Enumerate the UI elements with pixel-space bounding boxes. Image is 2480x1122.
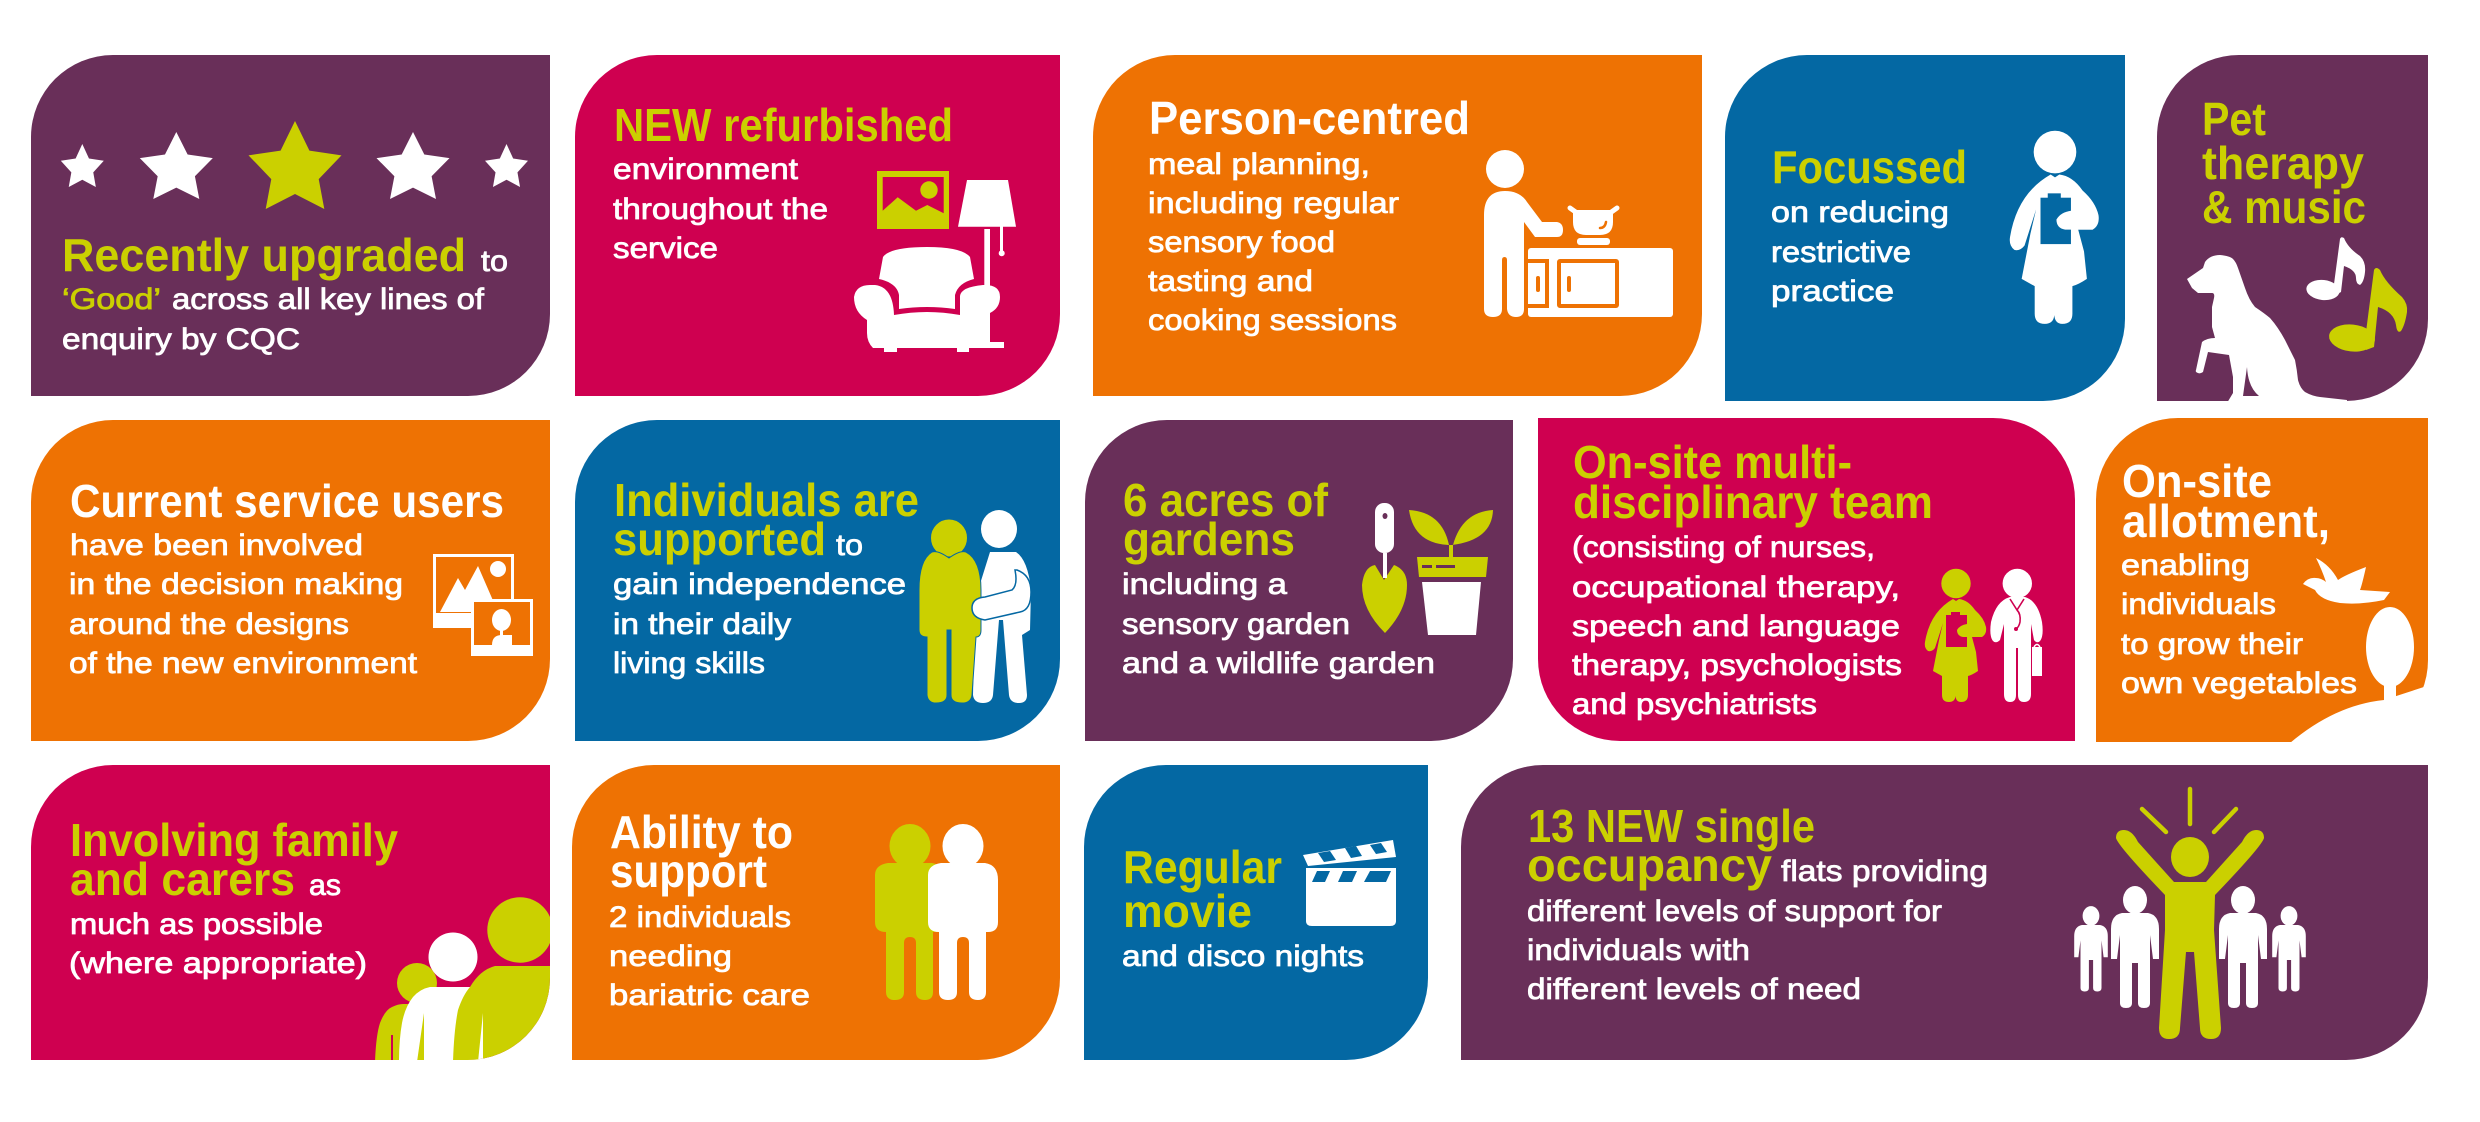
- body text: ‘Good’: [62, 283, 161, 316]
- icon: nurse with clipboard: [2010, 131, 2099, 324]
- body text: as: [309, 869, 341, 902]
- icon: lime person: [875, 824, 945, 1000]
- panel: person-centred: [1093, 55, 1702, 396]
- body text: [613, 153, 828, 265]
- heading: [2122, 455, 2330, 547]
- body text: to: [481, 245, 508, 278]
- body text: sensory garden: [1122, 608, 1350, 641]
- panel background: [2157, 55, 2428, 401]
- body text: individuals with: [1527, 934, 1750, 967]
- body text: including regular: [1148, 187, 1399, 220]
- panel background: [575, 420, 1060, 741]
- body text: and disco nights: [1122, 940, 1364, 973]
- icon: five stars: [61, 121, 528, 209]
- body text: individuals: [2121, 588, 2276, 621]
- heading: and carers: [70, 853, 295, 905]
- body text: enquiry by CQC: [62, 323, 300, 356]
- body text: to: [836, 529, 863, 562]
- icon: person cooking: [1484, 150, 1673, 317]
- icon: raised arms person with rays: [2116, 789, 2264, 1039]
- body text: speech and language: [1572, 610, 1900, 643]
- body text: on reducing: [1771, 196, 1949, 229]
- body text: own vegetables: [2121, 667, 2357, 700]
- heading: Pet: [2202, 93, 2266, 145]
- heading: supported: [613, 513, 826, 565]
- body text: have been involved: [70, 529, 363, 562]
- heading: allotment,: [2122, 495, 2330, 547]
- heading: [613, 474, 919, 565]
- icon: white music note: [2305, 237, 2365, 302]
- body text: of the new environment: [69, 647, 418, 680]
- body text: bariatric care: [609, 979, 810, 1012]
- panel: pet therapy and music: [2157, 55, 2428, 403]
- panel: on-site allotment: [2096, 418, 2430, 743]
- icon: bird: [2303, 558, 2390, 604]
- heading: [2202, 93, 2366, 233]
- body text: cooking sessions: [1148, 304, 1397, 337]
- heading: 13 NEW single: [1528, 800, 1815, 852]
- heading: Individuals are: [614, 474, 919, 526]
- heading: Focussed: [1772, 141, 1967, 193]
- body text: tasting and: [1148, 265, 1313, 298]
- panel background: [572, 765, 1060, 1060]
- body text: sensory food: [1148, 226, 1335, 259]
- heading: NEW refurbished: [614, 99, 953, 151]
- heading: & music: [2202, 181, 2366, 233]
- icon: group of four white people: [2074, 886, 2306, 1008]
- panel: regular movie: [1084, 765, 1428, 1060]
- body text: [2121, 549, 2357, 700]
- heading: Regular: [1123, 841, 1282, 893]
- panel: recently upgraded: [31, 55, 550, 396]
- heading: [610, 806, 793, 897]
- panel: on-site multi-disciplinary team: [1538, 418, 2075, 741]
- body text: in the decision making: [69, 568, 403, 601]
- heading: Recently upgraded: [62, 229, 466, 281]
- icon: nurse: [1925, 569, 1986, 702]
- body text: [1771, 196, 1949, 308]
- heading: [70, 814, 398, 905]
- body text: needing: [609, 940, 732, 973]
- heading: [1527, 800, 1815, 891]
- body text: [1148, 148, 1399, 337]
- body text: in their daily: [613, 608, 791, 641]
- heading: Current service users: [70, 475, 504, 527]
- icon: picture frame: [877, 171, 949, 229]
- body text: [609, 901, 810, 1012]
- icon: clapperboard: [1303, 840, 1396, 926]
- body text: occupational therapy,: [1572, 571, 1900, 604]
- body text: meal planning,: [1148, 148, 1370, 181]
- panel: six acres of gardens: [1085, 420, 1513, 741]
- panel: individuals are supported: [575, 420, 1060, 741]
- body text: environment: [613, 153, 799, 186]
- body text: around the designs: [69, 608, 349, 641]
- body text: [1527, 855, 1988, 1006]
- heading: 6 acres of: [1123, 474, 1329, 526]
- panel: current service users: [31, 420, 550, 741]
- icon: family group: [375, 897, 553, 1062]
- panel: new refurbished: [575, 55, 1060, 396]
- panel background: [1538, 418, 2075, 741]
- body text: different levels of need: [1527, 973, 1861, 1006]
- body text: [69, 529, 418, 680]
- panel: ability to support: [572, 765, 1060, 1060]
- heading: Involving family: [70, 814, 398, 866]
- heading: [1573, 436, 1933, 528]
- panel background: [31, 420, 550, 741]
- body text: flats providing: [1781, 855, 1988, 888]
- body text: different levels of support for: [1527, 895, 1942, 928]
- heading: gardens: [1123, 513, 1295, 565]
- panel: focussed: [1725, 55, 2125, 401]
- body text: service: [613, 232, 718, 265]
- body text: and psychiatrists: [1572, 688, 1817, 721]
- body text: to grow their: [2121, 628, 2303, 661]
- icon: two people supporting: [919, 510, 1031, 703]
- body text: and a wildlife garden: [1122, 647, 1435, 680]
- body text: [1122, 568, 1435, 680]
- body text: 2 individuals: [609, 901, 791, 934]
- body text: including a: [1122, 568, 1287, 601]
- panel background: [1725, 55, 2125, 401]
- icon: tree on a hill: [2290, 607, 2430, 743]
- icon: pictures: [433, 554, 533, 656]
- heading: On-site multi-: [1573, 436, 1852, 488]
- icon: doctor: [1990, 569, 2043, 702]
- body text: (consisting of nurses,: [1572, 531, 1875, 564]
- body text: living skills: [613, 647, 765, 680]
- icon: dog: [2187, 255, 2347, 403]
- body text: much as possible: [70, 908, 323, 941]
- heading: [1123, 841, 1282, 937]
- panel background: [31, 55, 550, 396]
- icon: white person: [928, 824, 998, 1000]
- body text: across all key lines of: [172, 283, 485, 316]
- panel background: [1084, 765, 1428, 1060]
- body text: [613, 529, 906, 680]
- icon: potted plant: [1409, 510, 1493, 635]
- panel background: [1085, 420, 1513, 741]
- heading: [1123, 474, 1329, 565]
- panel: thirteen new flats: [1461, 765, 2428, 1060]
- icon: trowel: [1362, 503, 1407, 633]
- body text: [62, 245, 508, 356]
- heading: Ability to: [610, 806, 793, 858]
- heading: disciplinary team: [1573, 476, 1933, 528]
- body text: throughout the: [613, 193, 828, 226]
- panel background: [575, 55, 1060, 396]
- body text: gain independence: [613, 568, 906, 601]
- heading: movie: [1123, 885, 1252, 937]
- panel background: [1093, 55, 1702, 396]
- body text: enabling: [2121, 549, 2250, 582]
- icon: lamp and armchair: [854, 180, 1016, 352]
- heading: support: [610, 845, 767, 897]
- body text: restrictive: [1771, 236, 1911, 269]
- icon: lime music note: [2328, 268, 2407, 354]
- panel background: [31, 765, 550, 1060]
- heading: On-site: [2122, 455, 2272, 507]
- body text: (where appropriate): [69, 947, 367, 980]
- panel: involving family and carers: [31, 765, 553, 1062]
- body text: [69, 869, 367, 980]
- heading: Person-centred: [1149, 92, 1470, 144]
- panel background: [2096, 418, 2428, 742]
- body text: therapy, psychologists: [1572, 649, 1902, 682]
- panel background: [1461, 765, 2428, 1060]
- heading: occupancy: [1527, 839, 1772, 891]
- heading: therapy: [2202, 137, 2364, 189]
- body text: [1572, 531, 1902, 721]
- body text: practice: [1771, 275, 1894, 308]
